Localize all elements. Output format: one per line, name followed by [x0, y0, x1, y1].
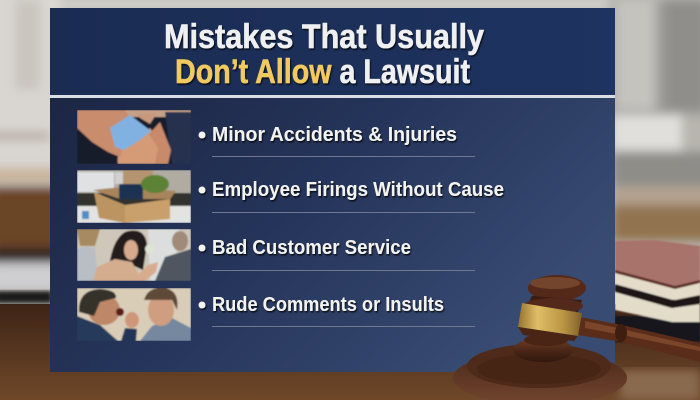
header divider [50, 95, 615, 98]
wooden table [0, 291, 700, 400]
gavel head [513, 275, 586, 362]
photo: two men arguing [77, 288, 191, 341]
navy sign panel [50, 8, 615, 372]
gavel sound block [453, 344, 627, 400]
title line 1: Mistakes That Usually [164, 18, 484, 56]
item: minor accidents: Minor Accidents & Injuries [212, 124, 457, 146]
photo: cardboard box of belongings [77, 170, 191, 223]
title line 2: Don’t Allow a Lawsuit [175, 53, 470, 91]
title [164, 18, 484, 91]
item: bad customer service: Bad Customer Service [212, 237, 411, 259]
item: employee firings: Employee Firings Without Cause [212, 179, 504, 201]
gavel handle [578, 317, 700, 362]
photo: knee injury with ice pack [77, 110, 191, 164]
header band [50, 8, 615, 95]
item: rude comments: Rude Comments or Insults [212, 294, 444, 316]
list items [198, 124, 504, 316]
panel body [50, 97, 615, 372]
photo: arguing customer [77, 229, 191, 281]
stack of books [615, 240, 700, 342]
gavel [453, 275, 700, 400]
